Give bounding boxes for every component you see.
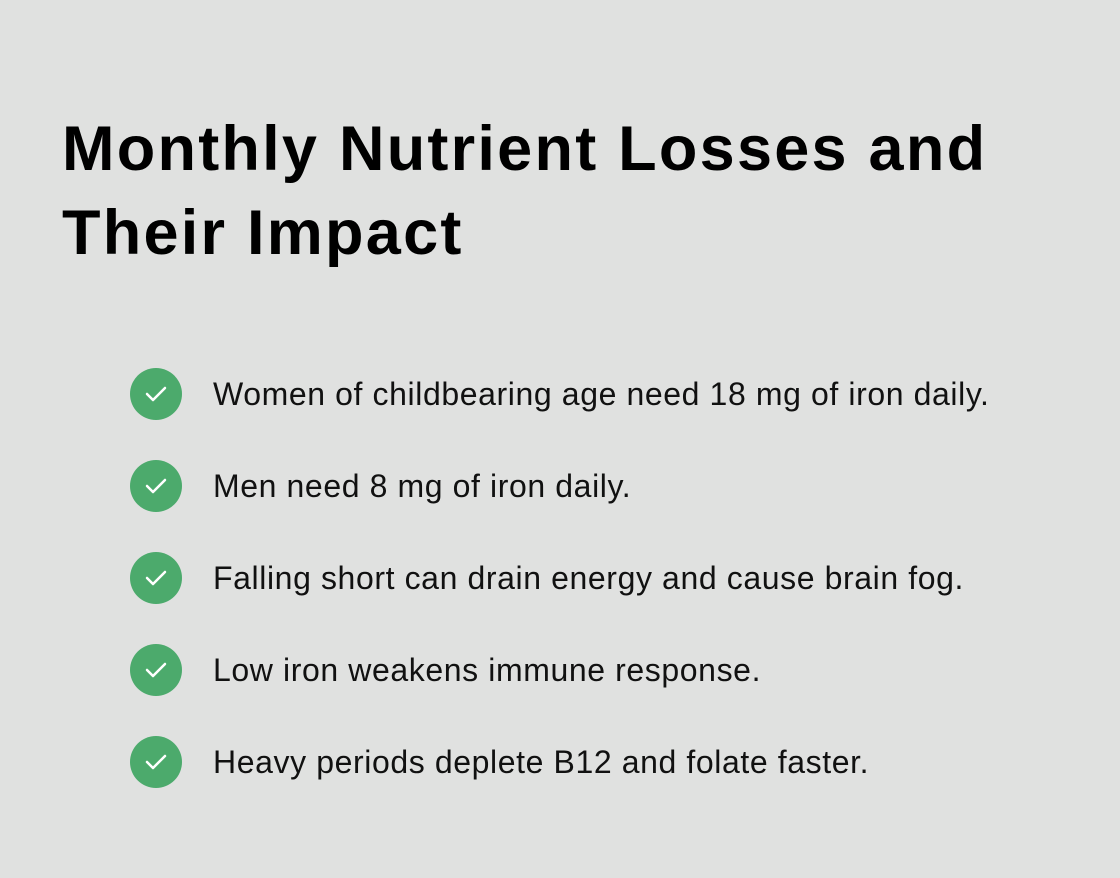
title: Monthly Nutrient Losses and <box>62 114 987 184</box>
text: Low iron weakens immune response. <box>213 652 761 688</box>
text: Women of childbearing age need 18 mg of iron daily. <box>213 376 990 412</box>
item 5 <box>130 736 869 788</box>
item 3 <box>130 552 964 604</box>
icon: check <box>130 644 182 696</box>
icon: check <box>130 368 182 420</box>
title <box>62 114 987 268</box>
title: Their Impact <box>62 198 464 268</box>
item 1 <box>130 368 990 420</box>
text: Heavy periods deplete B12 and folate faster. <box>213 744 869 780</box>
item 4 <box>130 644 761 696</box>
item 2 <box>130 460 631 512</box>
text: Men need 8 mg of iron daily. <box>213 468 631 504</box>
icon: check <box>130 460 182 512</box>
icon: check <box>130 552 182 604</box>
icon: check <box>130 736 182 788</box>
text: Falling short can drain energy and cause brain fog. <box>213 560 964 596</box>
